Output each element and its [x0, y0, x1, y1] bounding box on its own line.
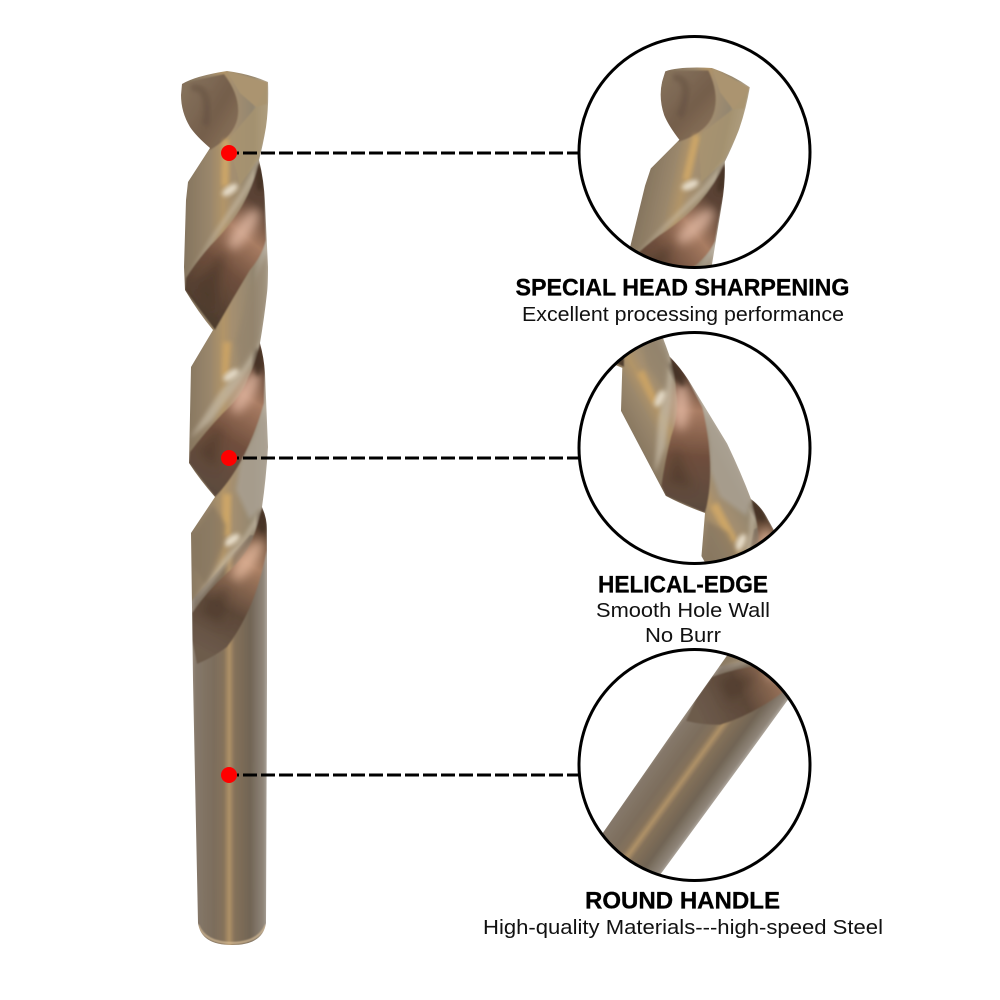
callout line: head: [221, 145, 578, 161]
text: helical description: [596, 599, 770, 647]
circle detail: round handle: [578, 648, 812, 882]
heading: helical edge: HELICAL-EDGE: [598, 572, 768, 598]
heading: special head sharpening: SPECIAL HEAD SHARPENING: [516, 274, 850, 302]
callout line: round handle: [221, 767, 578, 783]
heading: round handle: ROUND HANDLE: [585, 888, 780, 914]
callout line: helical edge: [221, 450, 578, 466]
circle detail: head: [578, 35, 812, 269]
text: handle description: High-quality Materials---high-speed Steel: [483, 916, 883, 939]
text: head description: Excellent processing performance: [522, 303, 844, 326]
text: helical description: Smooth Hole Wall: [596, 599, 770, 622]
circle detail: helical edge: [578, 331, 812, 565]
text: helical description: No Burr: [645, 624, 721, 647]
panel: full drill bit: [175, 60, 275, 950]
